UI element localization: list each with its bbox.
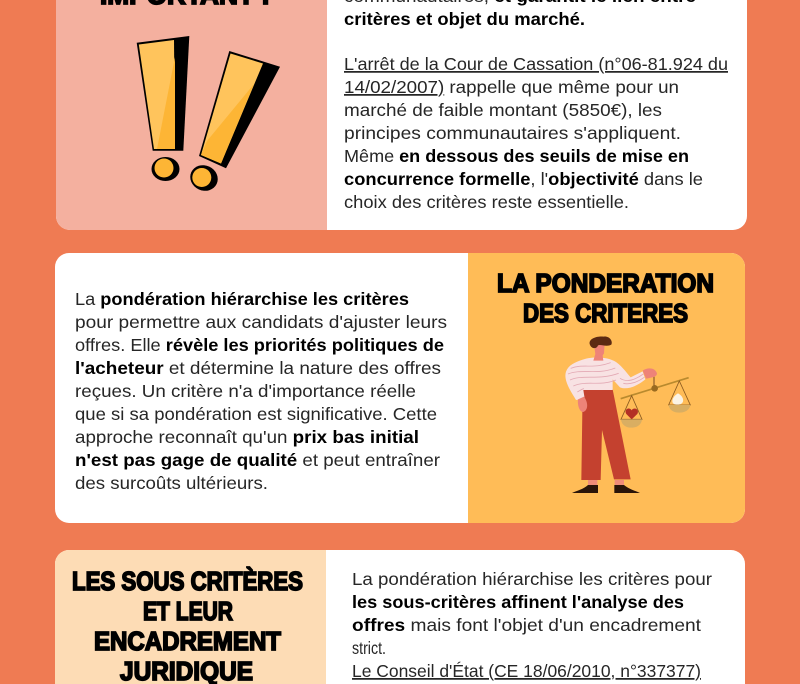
panel: les sous-critères [55,550,745,684]
panel: la pondération des critères [55,253,745,523]
heading: les sous critères: ENCADREMENT [94,626,281,656]
text block: legal reminder: concurrence formelle , l'objectivité dans le [344,169,703,189]
heading: les sous critères: LES SOUS CRITÈRES [72,566,303,596]
text block: sous-critères [352,569,712,681]
text block: sous-critères: offres mais font l'objet d'un encadrement [352,615,701,635]
scale beam [621,378,689,399]
left pan with heart [621,396,642,428]
heading: la pondération des critères: DES CRITERES [523,298,688,328]
panel: important [56,0,747,230]
hand and arm skin [643,368,657,379]
heading: la pondération des critères: LA PONDERATION [497,268,714,298]
icon: left exclamation mark [137,36,189,181]
text block: pondération: des surcoûts ultérieurs. [75,473,268,493]
text block: legal reminder: 14/02/2007) rappelle que même pour un [344,77,679,97]
text block: pondération: pour permettre aux candidats d'ajuster leurs [75,312,447,332]
icon: man holding scales [565,336,690,493]
text block: legal reminder: critères et objet du marché. [344,9,585,29]
text block: legal reminder: Même en dessous des seuils de mise en [344,146,689,166]
shirt [565,357,645,400]
heading: les sous critères: ET LEUR [143,596,233,626]
text block: pondération: n'est pas gage de qualité et peut entraîner [75,450,440,470]
text block: legal reminder: marché de faible montant (5850€), les [344,100,662,120]
text block: pondération: l'acheteur et détermine la nature des offres [75,358,441,378]
text block: pondération: que si sa pondération est significative. Cette [75,404,437,424]
text block: pondération [75,289,447,493]
hair [590,336,612,348]
text block: pondération: reçues. Un critère n'a d'importance réelle [75,381,416,401]
feet and shoes [588,480,624,485]
pants [581,389,631,480]
text block: legal reminder: choix des critères reste essentielle. [344,192,629,212]
head and neck [593,343,605,361]
icon: right exclamation mark [186,51,280,195]
text block: pondération: La pondération hiérarchise les critères [75,289,409,309]
text block: sous-critères: Le Conseil d'État (CE 18/06/2010, n°337377) [352,661,701,681]
text block: sous-critères: La pondération hiérarchise les critères pour [352,569,712,589]
text block: pondération: approche reconnaît qu'un prix bas initial [75,427,419,447]
heading: les sous critères [72,566,303,684]
text block: sous-critères: strict. [352,638,386,658]
text block: legal reminder [344,0,728,212]
text block: legal reminder: principes communautaires s'appliquent. [344,123,681,143]
text block: pondération: offres. Elle révèle les priorités politiques de [75,335,444,355]
right pan with money bag [669,381,690,413]
heading: la pondération des critères [497,268,714,328]
text block: legal reminder: L'arrêt de la Cour de Cassation (n°06-81.924 du [344,54,728,74]
text block: sous-critères: les sous-critères affinent l'analyse des [352,592,684,612]
